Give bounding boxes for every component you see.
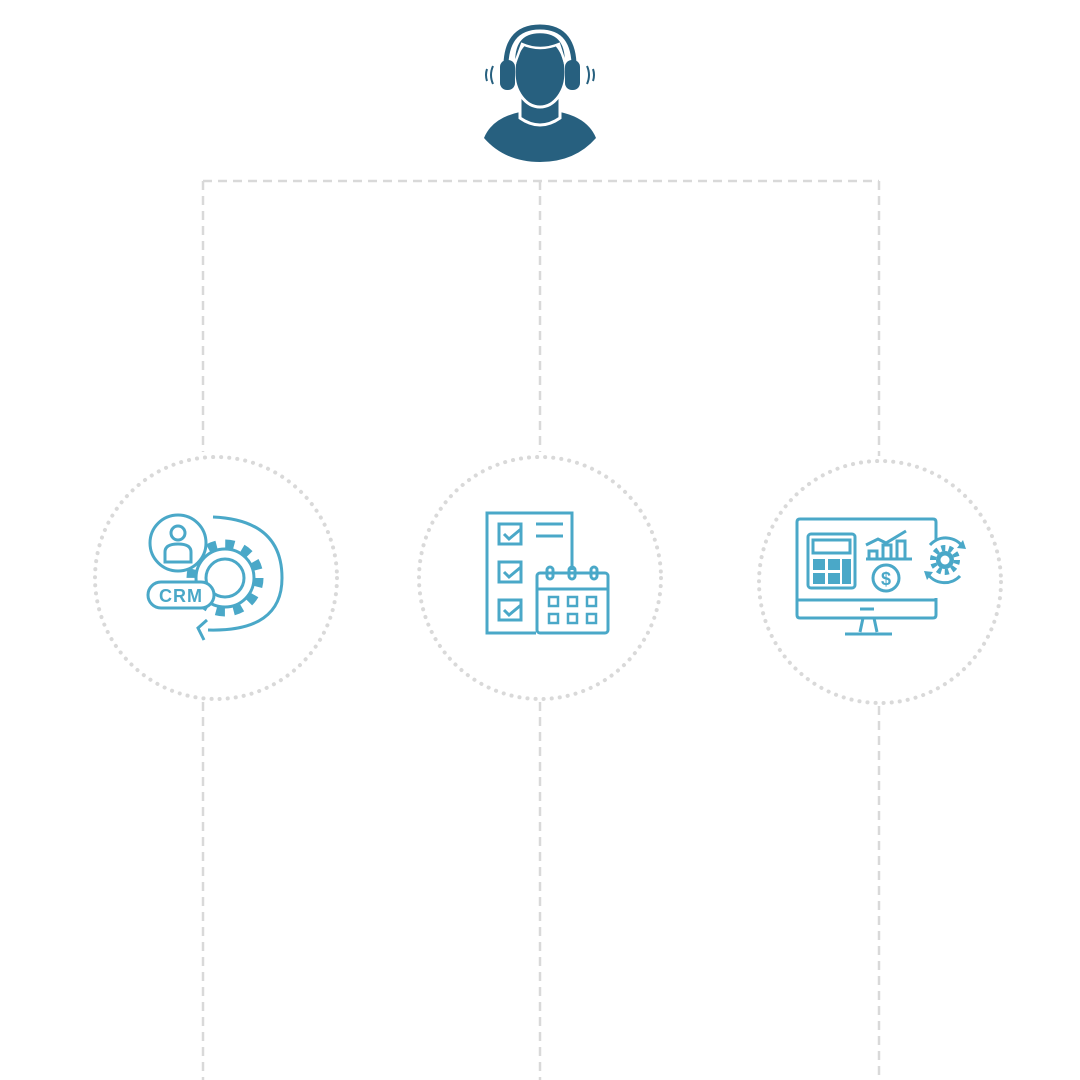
panel: schedule circle [419, 457, 661, 699]
icon: monitor finance [797, 519, 963, 634]
panel: finance circle: $ [881, 569, 891, 589]
panel: CRM circle [95, 457, 337, 699]
icon: checklist calendar [487, 513, 608, 633]
panel: finance circle [759, 461, 1001, 703]
icon: agent with headset [484, 27, 596, 162]
icon: CRM [148, 515, 282, 640]
connector lines [203, 181, 879, 1080]
text: CRM: CRM [159, 586, 203, 606]
